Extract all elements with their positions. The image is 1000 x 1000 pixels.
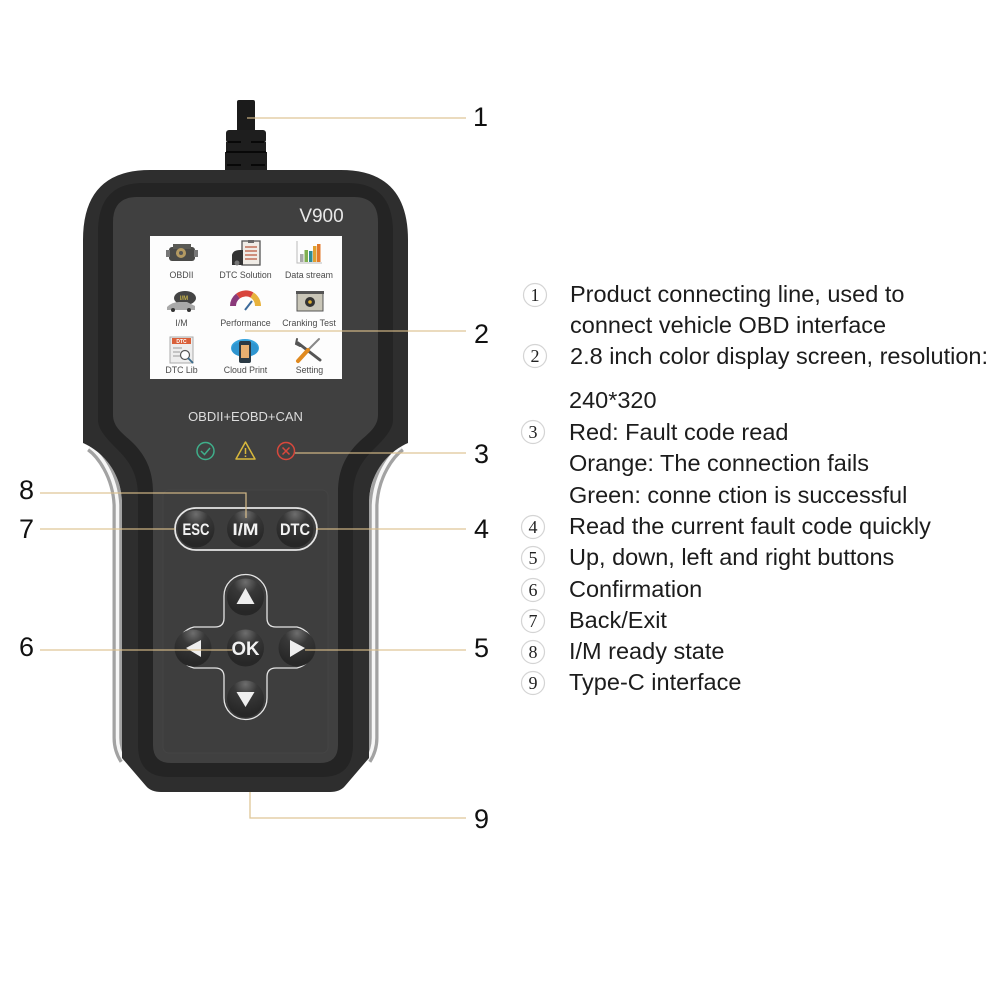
button: ESC: ESC xyxy=(182,521,210,539)
button: right xyxy=(278,630,316,666)
model name: V900 xyxy=(299,206,344,227)
directional pad xyxy=(174,574,316,719)
legend item 2: 240*320 xyxy=(569,387,657,413)
button: left xyxy=(174,630,212,666)
callout numbers: 4 xyxy=(474,514,489,544)
callout numbers: 2 xyxy=(474,319,489,349)
button: OK: OK xyxy=(232,639,260,660)
legend item 7: Back/Exit xyxy=(569,607,667,633)
icon: engine OBDII xyxy=(166,244,198,261)
legend item 3 xyxy=(522,419,907,508)
legend item 4: Read the current fault code quickly xyxy=(569,513,931,539)
display screen: I/M xyxy=(175,318,188,328)
icon: cloud print xyxy=(231,339,259,363)
icon: green status light xyxy=(197,442,214,460)
legend item 6: 6 xyxy=(528,580,538,600)
display screen: Data stream xyxy=(285,270,333,280)
icon: performance gauge xyxy=(233,293,258,310)
callout numbers: 7 xyxy=(19,514,34,544)
icon: red status light xyxy=(278,442,294,460)
display screen: DTC Lib xyxy=(165,365,198,375)
button: OK xyxy=(227,630,264,666)
legend item 1 xyxy=(524,281,904,338)
display screen: Cloud Print xyxy=(224,365,268,375)
callout numbers xyxy=(19,102,489,834)
device body xyxy=(83,170,408,792)
legend item 9: Type-C interface xyxy=(569,669,741,695)
button: up xyxy=(227,578,264,616)
legend item 3: Green: conne ction is successful xyxy=(569,482,907,508)
display screen: Setting xyxy=(296,365,323,375)
leader lines xyxy=(40,118,466,818)
icon: setting tools xyxy=(296,339,320,361)
callout numbers: 6 xyxy=(19,632,34,662)
legend item 8: 8 xyxy=(528,642,538,662)
callout numbers: 8 xyxy=(19,475,34,505)
icon: DTC library: DTC xyxy=(176,339,187,345)
callout numbers: 9 xyxy=(474,804,489,834)
display screen xyxy=(150,236,342,379)
legend item 7 xyxy=(522,607,667,633)
legend item 1: connect vehicle OBD interface xyxy=(570,312,886,338)
legend item 7: 7 xyxy=(528,611,538,631)
button: DTC: DTC xyxy=(280,521,310,539)
silver side strips xyxy=(90,447,401,760)
icon: DTC library xyxy=(170,337,193,363)
display screen: OBDII xyxy=(170,270,193,280)
callout numbers: 1 xyxy=(473,102,488,132)
legend item 2 xyxy=(524,343,988,413)
numbered legend xyxy=(522,281,988,695)
icon: I/M xyxy=(167,291,196,312)
callout numbers: 5 xyxy=(474,633,489,663)
legend item 1: Product connecting line, used to xyxy=(570,281,904,307)
icon: DTC solution xyxy=(232,240,260,266)
icon: battery cranking test xyxy=(296,291,324,311)
display screen: Cranking Test xyxy=(282,318,336,328)
button: down xyxy=(227,680,264,718)
function button group xyxy=(175,508,317,550)
legend item 6: Confirmation xyxy=(569,576,702,602)
protocol label: OBDII+EOBD+CAN xyxy=(188,409,303,424)
display screen: DTC Solution xyxy=(219,270,272,280)
callout numbers: 3 xyxy=(474,439,489,469)
legend item 4: 4 xyxy=(528,517,538,537)
legend item 5: 5 xyxy=(528,548,538,568)
inner ring xyxy=(98,183,393,777)
legend item 8: I/M ready state xyxy=(569,638,724,664)
button: I/M xyxy=(227,510,264,548)
front panel xyxy=(113,197,378,763)
legend item 3: Red: Fault code read xyxy=(569,419,788,445)
display screen: Performance xyxy=(220,318,271,328)
legend item 2: 2.8 inch color display screen, resolution: xyxy=(570,343,988,369)
legend item 1: 1 xyxy=(530,285,540,305)
icon: data stream xyxy=(297,241,322,263)
legend item 2: 2 xyxy=(530,346,540,366)
legend item 3: Orange: The connection fails xyxy=(569,450,869,476)
button: ESC xyxy=(178,510,214,548)
connecting cable xyxy=(225,100,267,170)
legend item 5: Up, down, left and right buttons xyxy=(569,544,894,570)
icon: I/M: I/M xyxy=(180,296,188,302)
legend item 3: 3 xyxy=(528,422,538,442)
scanner device xyxy=(83,100,408,792)
button: DTC xyxy=(276,510,314,548)
button: I/M: I/M xyxy=(232,521,258,539)
icon: orange status light xyxy=(236,442,255,459)
legend item 9: 9 xyxy=(528,673,538,693)
keypad recess xyxy=(163,490,328,753)
